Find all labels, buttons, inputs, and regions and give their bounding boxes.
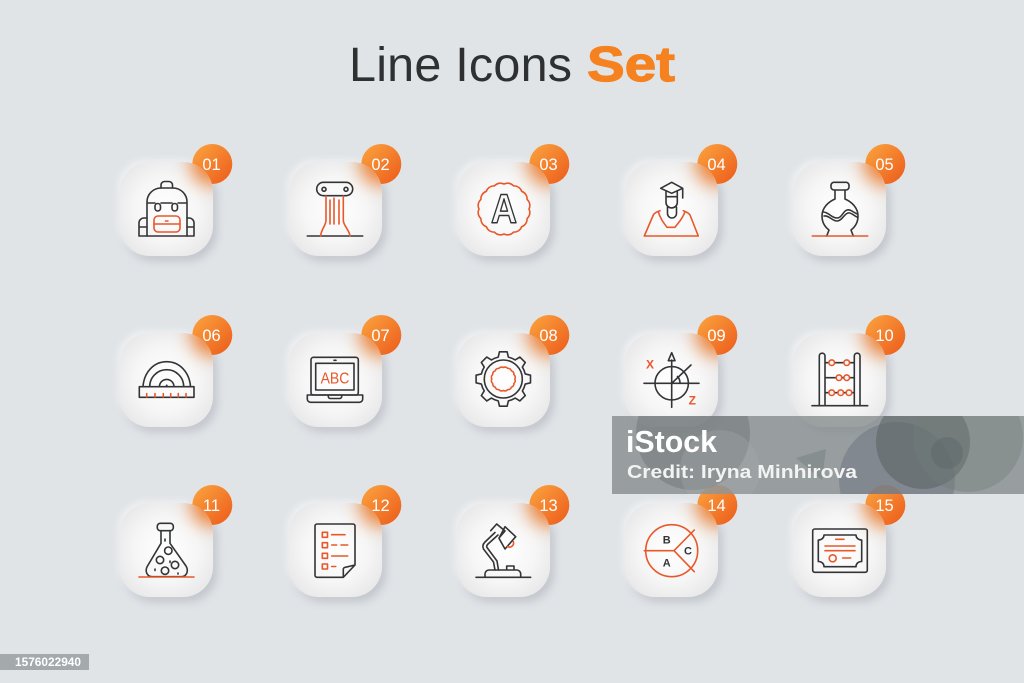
badge number 15: 15	[875, 497, 894, 515]
icon: ionic column	[307, 182, 363, 236]
icon: desk lamp	[476, 524, 531, 577]
badge number 08: 08	[539, 327, 558, 345]
badge number 10: 10	[875, 327, 894, 345]
icon: abacus	[812, 353, 868, 406]
icon: protractor	[139, 362, 194, 397]
badge number 14: 14	[707, 497, 726, 515]
image id tag: 1576022940	[15, 655, 81, 669]
icon: ABC pie chart	[644, 525, 698, 577]
card 13: desk lamp	[454, 484, 570, 602]
icon: laptop with ABC: ABC	[321, 370, 349, 387]
title	[349, 38, 675, 92]
icon: coordinate axes and circle: X	[646, 358, 654, 372]
icon: ABC pie chart: B	[663, 534, 671, 546]
badge number 02: 02	[371, 156, 390, 174]
watermark credit: Credit: Iryna Minhirova	[627, 462, 858, 482]
icon: round flask	[812, 182, 868, 236]
badge number 03: 03	[539, 156, 558, 174]
badge number 06: 06	[202, 327, 221, 345]
badge number 01: 01	[202, 156, 221, 174]
card 01: backpack	[117, 143, 233, 261]
icon: coordinate axes and circle	[644, 353, 699, 408]
card 08: gear	[454, 314, 570, 432]
title: Set	[587, 38, 675, 92]
badge number 09: 09	[707, 327, 726, 345]
card 12: checklist	[286, 484, 402, 602]
badge number 13: 13	[539, 497, 558, 515]
card 09: axes	[622, 314, 738, 432]
icon: ABC pie chart: C	[684, 546, 692, 558]
card 03: grade A badge	[454, 143, 570, 261]
icon: ABC pie chart: A	[663, 557, 671, 569]
watermark banner	[612, 416, 1024, 494]
icon: graduate in cap and gown	[644, 182, 698, 236]
icon: backpack	[139, 182, 194, 236]
card 15: certificate	[790, 484, 906, 602]
card 02: column	[286, 143, 402, 261]
icon: coordinate axes and circle: Z	[689, 394, 696, 408]
title: Line Icons	[349, 38, 572, 92]
badge number 11: 11	[203, 497, 220, 515]
icon: checklist page	[315, 524, 355, 577]
icon: grade A seal: A	[491, 186, 517, 232]
badge number 07: 07	[371, 327, 390, 345]
icon: conical flask	[139, 523, 194, 577]
card 14: pie ABC	[622, 484, 738, 602]
icon: certificate	[813, 529, 867, 572]
card 07: laptop ABC	[286, 314, 402, 432]
card 04: graduate	[622, 143, 738, 261]
icon: gear	[476, 352, 530, 406]
badge number 12: 12	[371, 497, 390, 515]
card 10: abacus	[790, 314, 906, 432]
watermark logo: iStock	[626, 424, 718, 459]
card 06: protractor	[117, 314, 233, 432]
card 05: round flask	[790, 143, 906, 261]
card 11: conical flask	[117, 484, 233, 602]
badge number 04: 04	[707, 156, 726, 174]
image id tag	[0, 654, 89, 670]
badge number 05: 05	[875, 156, 894, 174]
